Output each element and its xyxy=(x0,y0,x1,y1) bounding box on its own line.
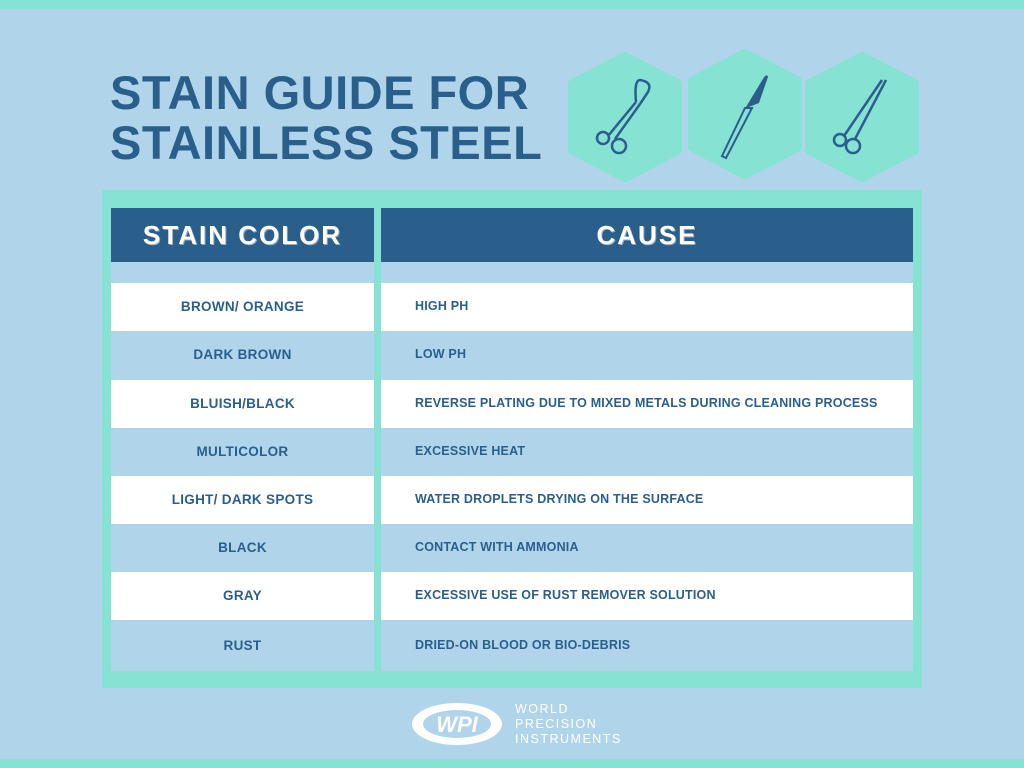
header: cause xyxy=(381,208,913,262)
table rows: EXCESSIVE USE OF RUST REMOVER SOLUTION xyxy=(415,588,716,602)
logo: INSTRUMENTS xyxy=(515,732,622,746)
header: cause: CAUSE xyxy=(596,220,698,250)
header: stain color xyxy=(111,208,374,262)
logo xyxy=(412,702,622,746)
table rows: LIGHT/ DARK SPOTS xyxy=(172,492,313,506)
logo: WORLD xyxy=(515,702,569,716)
table rows: DARK BROWN xyxy=(193,346,292,362)
table xyxy=(102,190,922,688)
table rows: GRAY xyxy=(223,588,262,602)
table rows: BLUISH/BLACK xyxy=(190,396,295,410)
top band xyxy=(0,0,1024,9)
icons: surgical instruments in hexagons xyxy=(568,49,919,182)
table rows: HIGH PH xyxy=(415,299,468,313)
table rows: MULTICOLOR xyxy=(196,444,288,458)
title: STAINLESS STEEL xyxy=(110,116,542,169)
title xyxy=(110,66,542,169)
title: STAIN GUIDE FOR xyxy=(110,66,529,119)
logo: PRECISION xyxy=(515,717,597,731)
table rows: RUST xyxy=(224,638,261,652)
table rows: BLACK xyxy=(218,540,267,554)
table rows: LOW PH xyxy=(415,347,466,361)
table rows: WATER DROPLETS DRYING ON THE SURFACE xyxy=(415,492,703,506)
table rows: BROWN/ ORANGE xyxy=(181,298,304,314)
table rows: EXCESSIVE HEAT xyxy=(415,444,525,458)
table rows: CONTACT WITH AMMONIA xyxy=(415,540,579,554)
table rows: REVERSE PLATING DUE TO MIXED METALS DURING CLEANING PROCESS xyxy=(415,396,878,410)
header: stain color: STAIN COLOR xyxy=(143,220,342,250)
bottom band xyxy=(0,759,1024,768)
table rows: DRIED-ON BLOOD OR BIO-DEBRIS xyxy=(415,638,630,652)
logo: WPI xyxy=(436,712,479,737)
